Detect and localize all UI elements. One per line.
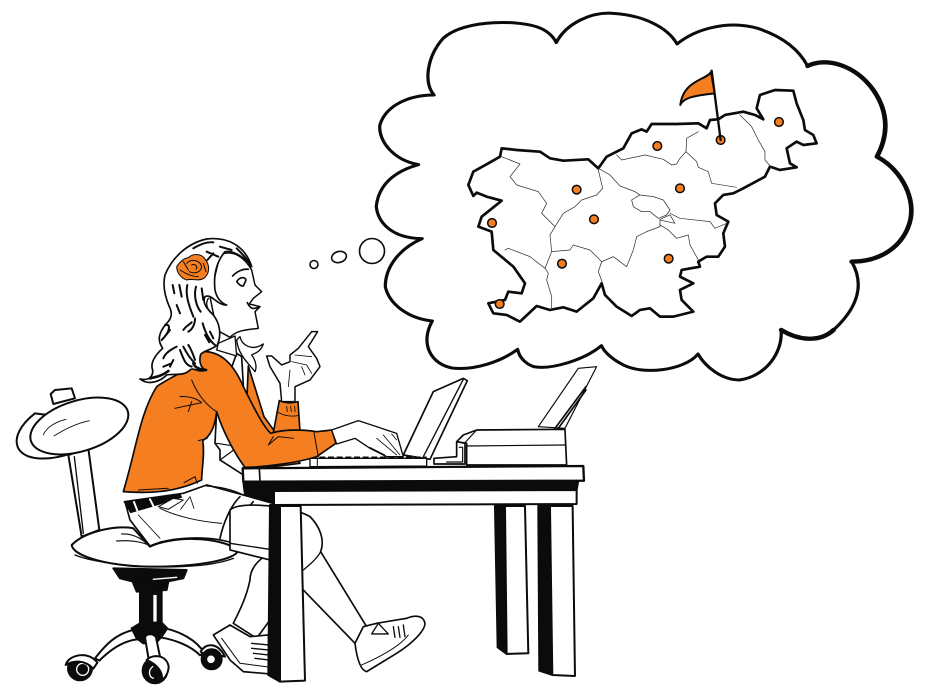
rose in hair	[177, 255, 209, 280]
desk apron	[243, 481, 578, 505]
printer	[434, 367, 597, 465]
thought cloud	[376, 13, 911, 380]
chair backrest	[17, 387, 135, 465]
back lower leg	[233, 553, 270, 638]
white shirt	[215, 353, 247, 475]
belt	[124, 494, 183, 513]
desk	[243, 367, 597, 682]
small thought bubbles	[310, 238, 384, 268]
typing hand	[332, 421, 403, 457]
chair back line	[74, 457, 83, 533]
sweater front	[245, 366, 300, 467]
front leg and shoe	[230, 505, 425, 672]
chair wheels	[66, 645, 225, 683]
sweater torso and arm	[123, 352, 336, 492]
pointing hand	[267, 332, 320, 402]
chair	[17, 387, 238, 683]
back hair by neck	[237, 337, 263, 372]
chair column and base	[95, 568, 204, 661]
raised sleeve cuff	[273, 401, 300, 433]
hair	[140, 239, 252, 382]
middle back leg	[495, 506, 528, 654]
chair back support	[68, 448, 99, 537]
desk top	[243, 466, 584, 482]
face features	[233, 269, 258, 308]
sweater and upper body	[123, 253, 336, 492]
front left leg	[268, 505, 305, 682]
back shoe	[213, 625, 270, 674]
flag	[680, 71, 721, 140]
map outline	[468, 90, 817, 322]
chair seat	[72, 527, 238, 567]
laptop	[310, 378, 467, 467]
chair headrest tab	[51, 388, 75, 404]
location dots	[488, 118, 783, 308]
face	[210, 253, 262, 337]
neck and collar	[217, 336, 237, 356]
sweater fold lines	[138, 380, 327, 490]
map of regions	[468, 71, 817, 322]
legs and shorts	[124, 485, 273, 674]
right back leg	[538, 506, 575, 676]
shorts	[125, 485, 273, 550]
hair strands	[150, 242, 251, 378]
front leg	[230, 505, 367, 643]
region borders	[502, 115, 771, 310]
front shoe	[355, 616, 425, 672]
